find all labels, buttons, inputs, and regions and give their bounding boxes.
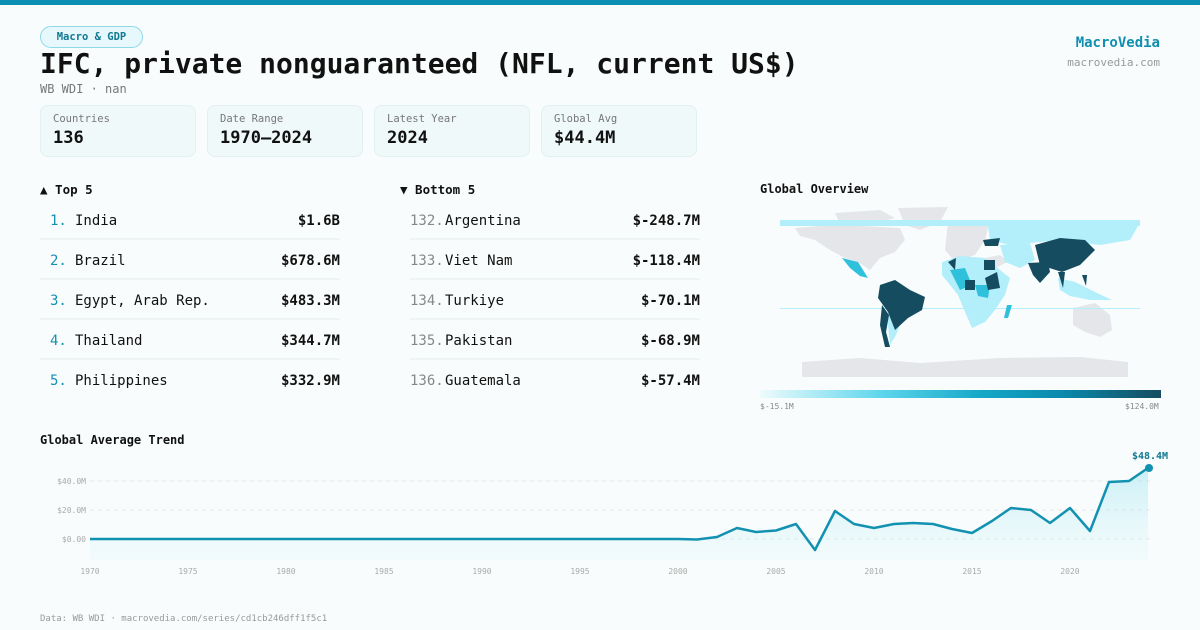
panel: top 5: 5.: [50, 373, 67, 389]
panel: top 5: $1.6B: [298, 213, 340, 229]
line chart: 1970: [80, 567, 100, 576]
text: Global Avg: [554, 113, 617, 125]
map heading: Global Overview: [760, 182, 868, 196]
stat cards: 136: [53, 128, 84, 148]
panel: top 5: 2.: [50, 253, 67, 269]
panel: top 5: $332.9M: [281, 373, 340, 389]
stat cards: Countries: [53, 113, 110, 125]
panel: top 5: Egypt, Arab Rep.: [75, 293, 210, 309]
panel: top 5: Brazil: [75, 253, 126, 269]
category tag: Macro & GDP: [57, 31, 126, 43]
panel: bottom 5: Argentina: [445, 213, 521, 229]
line chart: $48.4M: [1132, 451, 1168, 462]
line chart: 2015: [962, 567, 982, 576]
category tag: [40, 26, 143, 48]
panel: bottom 5: 132.: [410, 213, 444, 229]
text: $44.4M: [554, 128, 615, 148]
panel: top 5: 1.: [50, 213, 67, 229]
line chart: $40.0M: [57, 477, 86, 486]
panel: bottom 5: $-70.1M: [641, 293, 700, 309]
line chart: 1995: [570, 567, 590, 576]
text: Latest Year: [387, 113, 457, 125]
panel: bottom 5: $-118.4M: [633, 253, 700, 269]
text: $124.0M: [1125, 402, 1159, 411]
panel: top 5: Thailand: [75, 333, 142, 349]
panel: top 5: [40, 182, 340, 389]
text: Date Range: [220, 113, 283, 125]
panel: top 5: 4.: [50, 333, 67, 349]
panel: bottom 5: $-57.4M: [641, 373, 700, 389]
line chart: 1980: [276, 567, 296, 576]
line chart: 1985: [374, 567, 394, 576]
stat cards: [40, 105, 196, 157]
panel: bottom 5: Turkiye: [445, 293, 504, 309]
panel: top 5: $344.7M: [281, 333, 340, 349]
panel: top 5: $483.3M: [281, 293, 340, 309]
line chart: 2000: [668, 567, 688, 576]
panel: bottom 5: 134.: [410, 293, 444, 309]
panel: top 5: India: [75, 213, 117, 229]
trend heading: Global Average Trend: [40, 433, 184, 447]
line chart: 1975: [178, 567, 198, 576]
brand: MacroVedia: [1076, 35, 1160, 51]
subtitle: WB WDI · nan: [40, 82, 127, 96]
color legend: [760, 390, 1161, 398]
panel: bottom 5: Pakistan: [445, 333, 512, 349]
top bar: [0, 0, 1200, 5]
panel: bottom 5: 135.: [410, 333, 444, 349]
panel: top 5: ▲ Top 5: [40, 182, 93, 197]
world map: [780, 207, 1140, 377]
text: 2024: [387, 128, 428, 148]
line chart: 2020: [1060, 567, 1080, 576]
panel: bottom 5: ▼ Bottom 5: [400, 182, 475, 197]
line chart: [57, 451, 1168, 576]
title: IFC, private nonguaranteed (NFL, current US$): [40, 47, 799, 80]
panel: bottom 5: $-68.9M: [641, 333, 700, 349]
line chart: $20.0M: [57, 506, 86, 515]
line chart: $0.00: [62, 535, 86, 544]
panel: bottom 5: [400, 182, 700, 389]
panel: bottom 5: $-248.7M: [633, 213, 700, 229]
brand: macrovedia.com: [1067, 56, 1160, 69]
panel: bottom 5: 133.: [410, 253, 444, 269]
footer source: Data: WB WDI · macrovedia.com/series/cd1cb246dff1f5c1: [40, 614, 327, 624]
line chart: 1990: [472, 567, 492, 576]
line chart: 2005: [766, 567, 786, 576]
panel: top 5: 3.: [50, 293, 67, 309]
line chart: 2010: [864, 567, 884, 576]
brand: [1067, 35, 1160, 69]
panel: bottom 5: Viet Nam: [445, 253, 512, 269]
panel: top 5: Philippines: [75, 373, 168, 389]
panel: top 5: $678.6M: [281, 253, 340, 269]
panel: bottom 5: Guatemala: [445, 373, 521, 389]
text: $-15.1M: [760, 402, 794, 411]
panel: bottom 5: 136.: [410, 373, 444, 389]
text: 1970–2024: [220, 128, 312, 148]
